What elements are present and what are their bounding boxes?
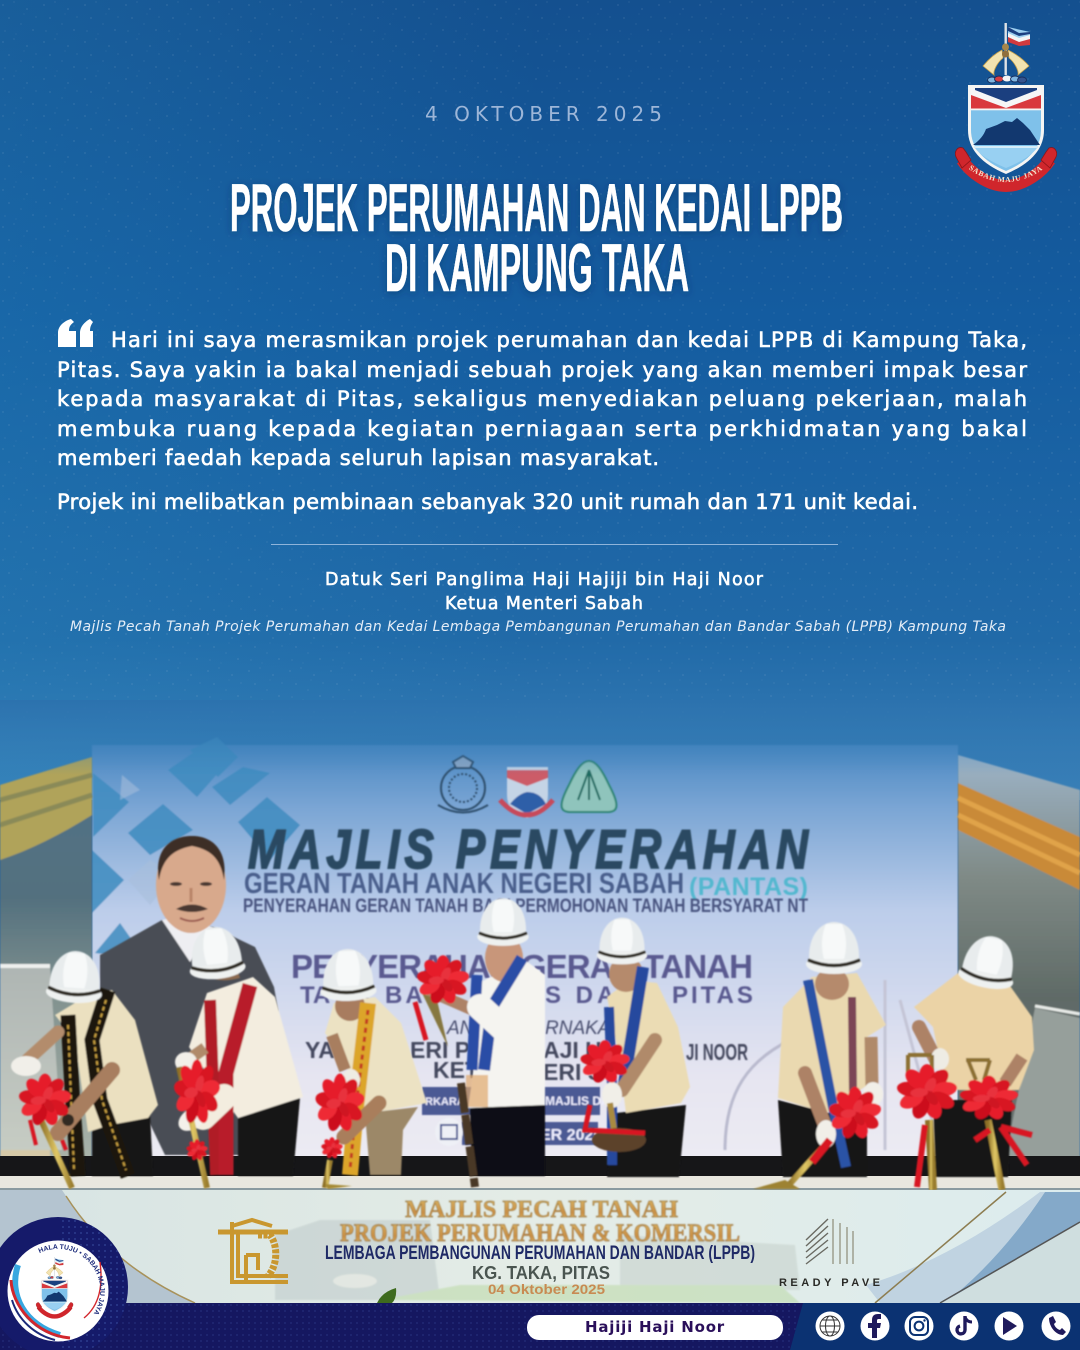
page background gradient [0,0,1080,800]
badge crest [36,1257,73,1316]
quote paragraph: kepada masyarakat di Pitas, sekaligus menyediakan peluang pekerjaan, malah [57,387,1027,411]
speaker attribution: Datuk Seri Panglima Haji Hajiji bin Haji Noor [325,570,764,590]
quote icon [58,319,93,347]
badge swooshes [11,1262,101,1340]
banner location: KG. TAKA, PITAS [472,1263,610,1283]
icon: phone [1042,1312,1070,1340]
logo: police crest [438,756,488,812]
badge white disc [8,1240,108,1342]
backdrop headline text: AJI H [543,1037,602,1063]
banner right corner swoosh [866,1192,1080,1303]
backdrop headline text: K BA [355,982,426,1009]
LED backdrop wall [92,737,958,1160]
backdrop headline text: YA [305,1037,335,1063]
backdrop headline text: PENYERAHAN GERAN TANAH [291,948,753,985]
backdrop headline text: S DAE [545,982,638,1009]
Sabah state crest: SABAH MAJU JAYA [969,166,1042,182]
green leaf [377,1288,396,1303]
main title [230,170,843,306]
main title: DI KAMPUNG TAKA [385,230,689,306]
name pill [527,1315,783,1340]
backdrop headline text: (PANTAS) [689,873,808,901]
date: 4 OKTOBER 2025 [425,102,662,126]
banner title: PROJEK PERUMAHAN & KOMERSIL [340,1220,740,1247]
backdrop headline text: KET [433,1057,479,1083]
backdrop headline text: PITAS [672,982,756,1009]
backdrop headline text: GERAN TANAH ANAK NEGERI SABAH [244,868,684,900]
banner date: 04 Oktober 2025 [488,1281,605,1297]
logo: Sabah crest on backdrop [500,767,553,818]
quote paragraph: Hari ini saya merasmikan projek perumahan dan kedai LPPB di Kampung Taka, [111,328,1027,352]
backdrop headline text: JI NOOR [686,1039,748,1065]
quote paragraph [57,328,1027,470]
icon: tiktok [950,1312,978,1340]
official 5 with blue sash and soil shovel [579,918,690,1177]
official 7 with twin shovels [896,931,1034,1190]
backdrop headline text: MAJLIS PENYERAHAN [248,818,809,880]
sponsor name: READY PAVE [779,1277,880,1289]
logo: green survey triangle [562,761,616,812]
backdrop headline text: PENYERAHAN GERAN TANAH BAGI PERMOHONAN TANAH BERSYARAT NT [243,896,808,917]
right side fabric and tent [958,755,1080,1160]
badge circular motto: HALA TUJU • SABAH MAJU JAYA [38,1244,105,1314]
LPPB gold logo [218,1220,288,1282]
top fade over photo [0,700,1080,775]
official 4: Chief Minister with blue sash [415,898,545,1187]
backdrop headline text: TA [300,982,330,1009]
quote paragraph: membuka ruang kepada kegiatan perniagaan serta perkhidmatan yang bakal [57,417,1027,441]
icon: facebook [860,1312,890,1340]
backdrop logos [438,756,616,818]
official 2 with red sash [173,924,303,1188]
backdrop headline text: RKARA [425,1096,465,1108]
official 3 with yellow sash [314,948,427,1189]
banner title: MAJLIS PECAH TANAH [405,1197,678,1223]
Hala Tuju badge [0,1217,128,1350]
name pill: Hajiji Haji Noor [585,1318,725,1336]
stage floor and table edge [0,1156,1080,1191]
Sabah state crest [954,23,1058,192]
backdrop headline text: MAJLIS DA [545,1094,610,1108]
Ready Pave logo [806,1219,853,1264]
quote paragraph: Pitas. Saya yakin ia bakal menjadi sebuah projek yang akan memberi impak besar [57,358,1027,382]
icon: instagram [904,1312,934,1340]
banner left corner swoosh [0,1190,195,1303]
banner organiser line: LEMBAGA PEMBANGUNAN PERUMAHAN DAN BANDAR (LPPB) [325,1243,755,1264]
speaker attribution: Majlis Pecah Tanah Projek Perumahan dan Kedai Lembaga Pembangunan Perumahan dan Bandar Sabah (LPPB) Kampung Taka [70,619,1006,635]
quote paragraph: memberi faedah kepada seluruh lapisan masyarakat. [57,446,659,470]
official 1 with black sash [11,949,158,1188]
left side fabric and tent [0,757,92,1160]
speaker attribution [70,570,1006,635]
icon: website globe [816,1312,844,1340]
backdrop headline text: ERI S [543,1059,603,1085]
backdrop headline text [243,818,940,1150]
faded building illustration [275,1220,800,1303]
project figures statement: Projek ini melibatkan pembinaan sebanyak 320 unit rumah dan 171 unit kedai. [57,490,918,514]
backdrop headline text: ER 2025 [540,1127,602,1144]
bottom navy bar [0,1303,1080,1350]
banner title [340,1197,740,1247]
backdrop headline text: ANG [446,1018,488,1039]
event banner on table [0,1190,1080,1304]
official 6 with woven sash [753,922,886,1189]
icon: youtube play [994,1312,1024,1340]
speaker attribution: Ketua Menteri Sabah [445,594,643,614]
backdrop headline text: RNAKAN O [545,1018,644,1039]
portrait of the Chief Minister on backdrop [100,836,278,1155]
backdrop headline text: ERI PA [410,1037,485,1063]
photo: groundbreaking ceremony [0,700,1080,1191]
